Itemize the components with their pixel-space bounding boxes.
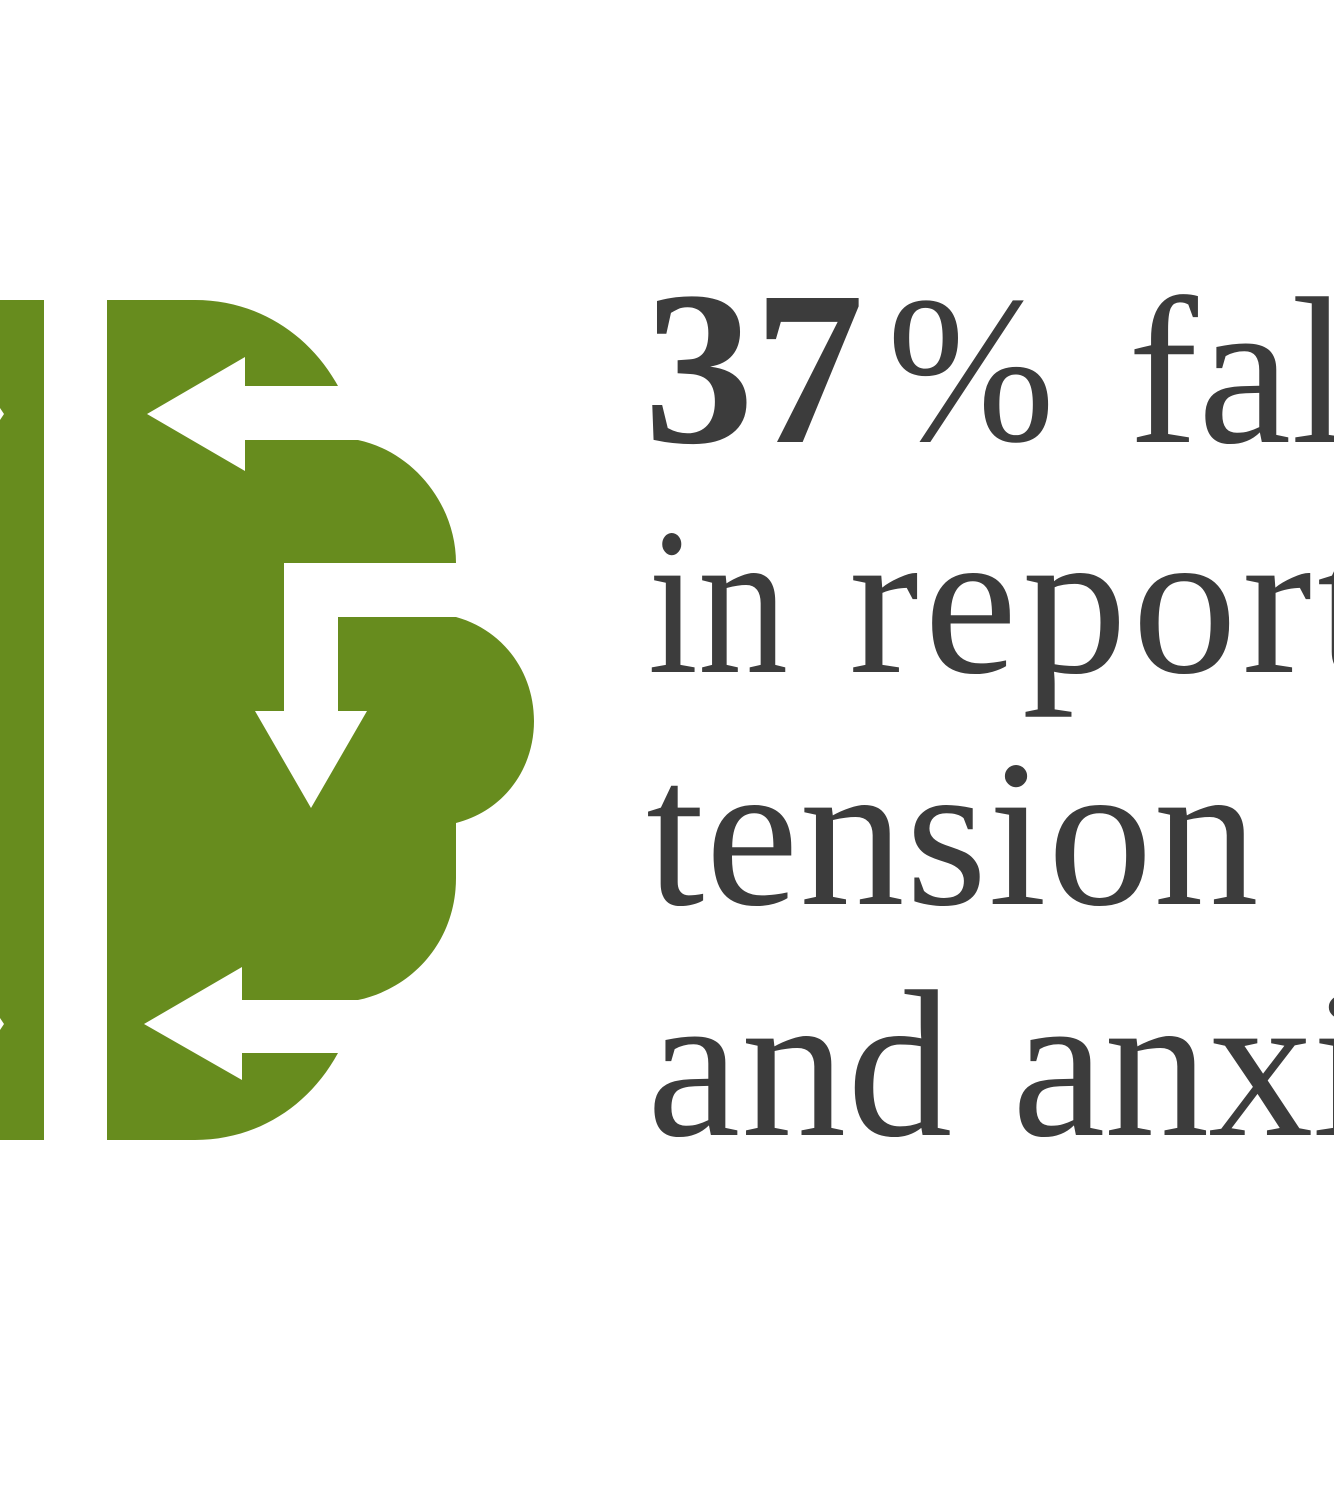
line 1: 37% fall: % — [887, 254, 1055, 486]
line 4: and anxiety — [647, 949, 1334, 1181]
line 3: tension: tension — [646, 718, 1260, 950]
line 1: 37% fall — [644, 246, 1334, 490]
line 2: in reported: in — [648, 486, 788, 718]
line 4: and anxiety: and — [647, 949, 953, 1181]
line 1: 37% fall: 37 — [644, 246, 864, 490]
left brain hemisphere (cropped) — [0, 300, 44, 1140]
right brain hemisphere with inward arrows — [107, 300, 534, 1140]
icon: brain made of arrows — [0, 300, 534, 1140]
headline text — [644, 246, 1334, 1181]
